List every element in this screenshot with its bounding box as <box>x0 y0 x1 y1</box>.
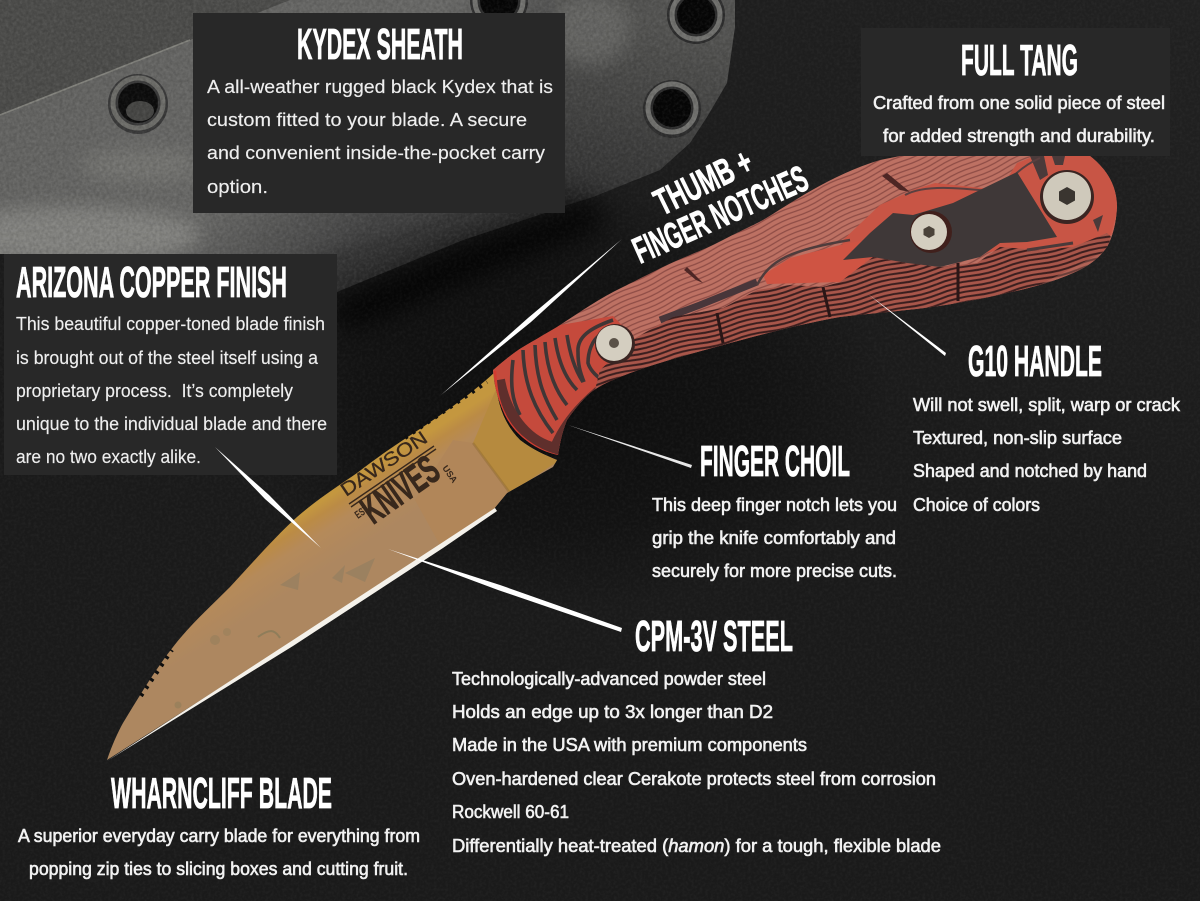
text: Wharncliff blade description: popping zip ties to slicing boxes and cutting fruit. <box>29 859 408 879</box>
red region around screws <box>840 154 1125 270</box>
sheath grain texture <box>0 0 734 254</box>
text: G10 handle list: Textured, non-slip surface <box>913 428 1122 448</box>
left dark contour band <box>498 370 630 450</box>
text: CPM-3V steel list <box>452 669 941 856</box>
panel: Kydex sheath: KYDEX SHEATH <box>297 20 463 69</box>
block: Wharncliff blade: WHARNCLIFF BLADE <box>111 769 332 818</box>
knife blade <box>107 372 560 761</box>
block: CPM-3V steel: CPM-3V STEEL <box>635 612 793 661</box>
handle left red end with stripes <box>488 316 636 460</box>
text: G10 handle list: Will not swell, split, warp or crack <box>913 395 1181 415</box>
spots <box>280 558 375 590</box>
text: Full tang description: Crafted from one solid piece of steel <box>873 93 1165 113</box>
text: Arizona copper description <box>16 314 327 467</box>
text: Kydex sheath description: A all-weather rugged black Kydex that is <box>207 76 553 97</box>
text: Arizona copper description: is brought out of the steel itself using a <box>16 348 319 368</box>
text: Finger choil description: This deep finger notch lets you <box>652 495 897 515</box>
text: Finger choil description: grip the knife comfortably and <box>652 528 896 548</box>
pin: large hex screw <box>1040 170 1094 224</box>
text: Wharncliff blade description: A superior everyday carry blade for everything from <box>18 826 420 846</box>
lower wavy band <box>595 233 1112 390</box>
sheath shadow fold <box>337 212 600 318</box>
text: CPM-3V steel list: Rockwell 60-61 <box>452 802 569 822</box>
bright red patch <box>764 244 862 284</box>
text: Arizona copper description: This beautiful copper-toned blade finish <box>16 314 325 334</box>
text: Arizona copper description: proprietary process. It’s completely <box>16 381 293 401</box>
icon: grommet top <box>470 0 528 30</box>
text: CPM-3V steel list: Oven-hardened clear Cerakote protects steel from corrosion <box>452 769 936 789</box>
panel: Full tang: FULL TANG <box>961 36 1078 85</box>
logo: Dawson Knives engraved: DAWSON <box>337 428 432 501</box>
block: CPM-3V steel <box>452 612 941 856</box>
text: G10 handle list: Choice of colors <box>913 495 1040 515</box>
text: Kydex sheath description: custom fitted to your blade. A secure <box>207 109 527 130</box>
label: thumb and finger notches: THUMB + <box>648 141 759 223</box>
text: Kydex sheath description <box>207 76 553 197</box>
panel: Arizona copper finish <box>4 254 337 475</box>
logo: Dawson Knives engraved: USA <box>440 463 460 485</box>
text: Arizona copper description: unique to the individual blade and there <box>16 414 327 434</box>
text: Wharncliff blade description <box>18 826 420 879</box>
text: G10 handle list <box>913 395 1181 515</box>
block: G10 handle <box>913 337 1181 515</box>
knife handle: G10 scales <box>493 156 1117 455</box>
panel: Full tang <box>861 28 1170 156</box>
block: Finger choil <box>652 437 897 581</box>
text: CPM-3V steel list: Made in the USA with premium components <box>452 735 807 755</box>
callout line: Arizona copper finish <box>215 447 321 548</box>
text: Arizona copper description: are no two exactly alike. <box>16 447 201 467</box>
notches <box>684 173 910 283</box>
panel: Arizona copper finish: ARIZONA COPPER FINISH <box>16 258 287 307</box>
block: Wharncliff blade <box>18 769 420 879</box>
spine serrations <box>405 382 487 438</box>
lighter far end of handle <box>1040 215 1116 285</box>
icon: grommet right upper <box>667 0 725 44</box>
text: Kydex sheath description: and convenient inside-the-pocket carry <box>207 142 546 163</box>
label: thumb and finger notches <box>627 141 814 271</box>
callout line: thumb and finger notches <box>441 239 622 395</box>
pin: middle screw <box>910 211 952 253</box>
text: Full tang description: for added strength and durability. <box>883 126 1155 146</box>
text: Finger choil description: securely for more precise cuts. <box>652 561 897 581</box>
ricasso area <box>473 390 557 492</box>
text: Full tang description <box>873 93 1165 146</box>
logo: Dawson Knives engraved: KNIVES <box>353 448 448 532</box>
dark streaks <box>660 282 757 320</box>
text: Kydex sheath description: option. <box>207 176 268 197</box>
text: CPM-3V steel list: Differentially heat-treated (hamon) for a tough, flexible blade <box>452 836 941 856</box>
callout line: finger choil <box>568 425 692 468</box>
text: Finger choil description <box>652 495 897 581</box>
callout line: G10 handle <box>868 294 946 356</box>
label: thumb and finger notches: FINGER NOTCHES <box>627 158 814 271</box>
logo: Dawson Knives engraved: EST <box>353 503 371 521</box>
blade edge highlight <box>107 508 497 761</box>
text: CPM-3V steel list: Holds an edge up to 3x longer than D2 <box>452 702 773 722</box>
pin: left screw <box>595 324 635 364</box>
logo: Dawson Knives engraved <box>337 428 460 532</box>
icon: grommet right lower <box>643 80 701 138</box>
kydex sheath photo <box>0 0 735 318</box>
callout line: CPM-3V steel <box>388 549 622 632</box>
black patch <box>843 172 1057 267</box>
text: G10 handle list: Shaped and notched by hand <box>913 461 1147 481</box>
block: Finger choil: FINGER CHOIL <box>700 437 850 486</box>
panel: Kydex sheath <box>193 13 565 213</box>
icon: grommet left <box>108 74 168 134</box>
text: CPM-3V steel list: Technologically-advanced powder steel <box>452 669 766 689</box>
